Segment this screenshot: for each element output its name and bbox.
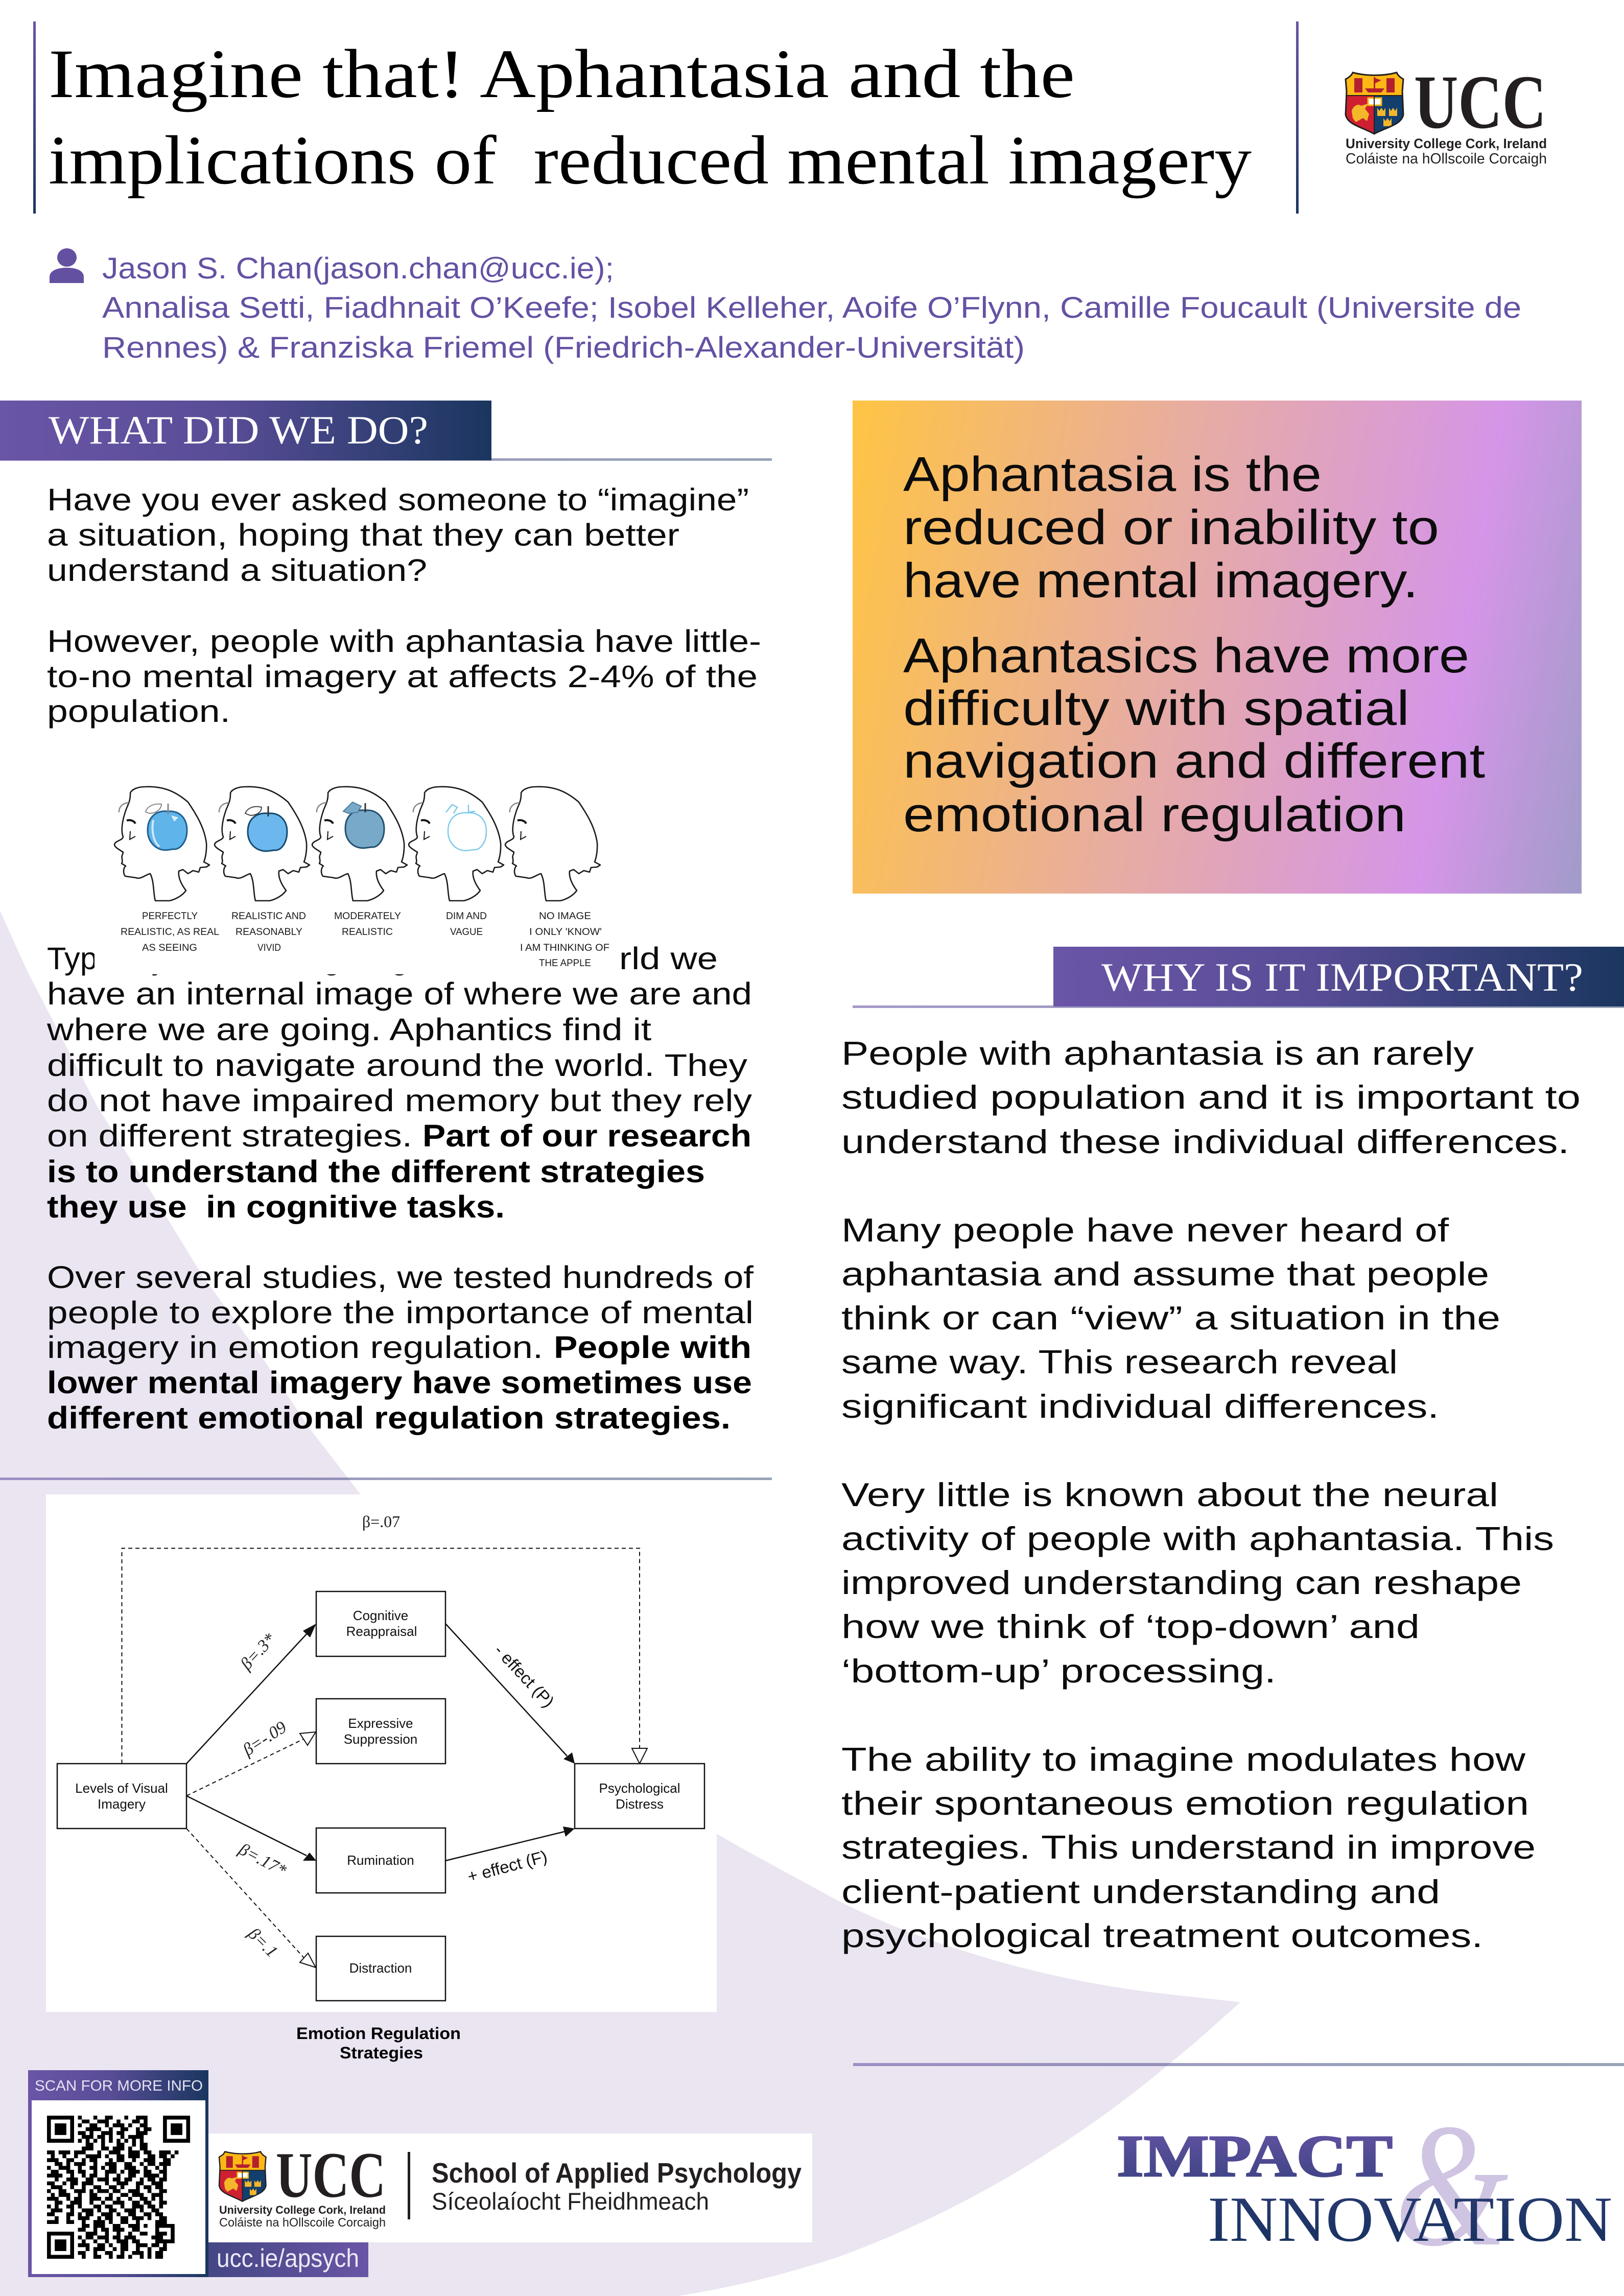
callout: consequences: navigation and different — [903, 734, 1485, 788]
logo: school of applied psychology: University College Cork, Ireland — [219, 2204, 386, 2216]
box: psychological distress: Distress — [616, 1796, 664, 1812]
text block: navigation strategies: Part of our research — [422, 1118, 751, 1153]
text block: why important 2: Many people have never heard of — [841, 1211, 1449, 1249]
heading: what did we do — [0, 401, 491, 460]
text block: emotion regulation studies: different emotional regulation strategies. — [47, 1400, 731, 1435]
QR code — [47, 2116, 190, 2259]
logo: UCC header — [1346, 60, 1547, 167]
heading: what did we do: WHAT DID WE DO? — [49, 408, 428, 452]
text block: navigation strategies: difficult to navigate around the world. They — [47, 1048, 748, 1083]
box: cognitive reappraisal: Reappraisal — [346, 1624, 417, 1639]
captions: REALISTIC — [342, 927, 393, 938]
arrow: imagery to rumination: β=.17* — [235, 1840, 289, 1880]
captions: REALISTIC, AS REAL — [121, 927, 219, 938]
arrow: rumination to distress: + effect (F) — [465, 1846, 549, 1886]
chart caption — [296, 2024, 461, 2062]
QR panel — [28, 2070, 368, 2277]
logo: impact and innovation: & — [1395, 2088, 1509, 2283]
arrow: imagery to suppression: β=-.09 — [239, 1718, 290, 1760]
text block: intro: to-no mental imagery at affects 2-4% of the — [47, 659, 758, 694]
bottom link bar: ucc.ie/apsych — [217, 2244, 359, 2272]
title rule right — [1296, 21, 1299, 214]
box: levels of visual imagery — [57, 1764, 186, 1829]
box: rumination — [316, 1828, 445, 1893]
captions: REASONABLY — [236, 927, 302, 938]
captions: PERFECTLY — [142, 911, 198, 922]
arrow: imagery to reappraisal — [186, 1624, 316, 1764]
UCC wordmark: UCC — [1414, 60, 1546, 145]
text block: intro — [47, 482, 761, 729]
box: levels of visual imagery: Imagery — [98, 1796, 146, 1812]
text block: intro: a situation, hoping that they can better — [47, 518, 679, 552]
text block: why important 3: ‘bottom-up’ processing. — [841, 1652, 1276, 1690]
text block: why important 3: how we think of ‘top-down’ and — [841, 1608, 1420, 1645]
text block: why important 2: think or can “view” a situation in the — [841, 1299, 1500, 1337]
logo: school of applied psychology: UCC — [276, 2140, 386, 2211]
text block: navigation strategies: is to understand the different strategies — [47, 1154, 705, 1189]
chart caption: Strategies — [340, 2044, 423, 2062]
captions: VIVID — [257, 943, 281, 953]
text block: why important 2 — [841, 1211, 1500, 1425]
callout: consequences: difficulty with spatial — [903, 681, 1409, 736]
text block: why important 2: aphantasia and assume that people — [841, 1255, 1489, 1293]
captions: MODERATELY — [334, 911, 401, 922]
text block: navigation strategies: they use in cognitive tasks. — [47, 1189, 505, 1224]
captions: VAGUE — [450, 927, 483, 938]
box: psychological distress — [575, 1764, 704, 1829]
top dashed path — [122, 1512, 647, 1764]
box: levels of visual imagery: Levels of Visual — [75, 1780, 168, 1796]
text block: why important 1: People with aphantasia is an rarely — [841, 1035, 1474, 1072]
top dashed path: β=.07 — [362, 1512, 400, 1531]
text block: emotion regulation studies: lower mental imagery have sometimes use — [47, 1365, 752, 1400]
text block: navigation strategies: do not have impaired memory but they rely — [47, 1083, 752, 1118]
callout: consequences: Aphantasics have more — [903, 628, 1469, 683]
logo: UCC header: University College Cork, Ireland — [1346, 136, 1547, 151]
text block: emotion regulation studies — [47, 1260, 754, 1435]
bottom link bar — [28, 2242, 368, 2277]
logo: school of applied psychology: School of Applied Psychology — [432, 2157, 802, 2189]
arrow: reappraisal to distress: - effect (P) — [491, 1641, 558, 1711]
text block: navigation strategies: Typically, when navigating around the wo — [47, 941, 616, 976]
text block: why important 4: client-patient understanding and — [841, 1873, 1440, 1910]
text block: why important 4: psychological treatment outcomes. — [841, 1917, 1483, 1954]
box: cognitive reappraisal — [316, 1591, 445, 1656]
text block: intro: population. — [47, 694, 230, 729]
captions: NO IMAGE — [539, 911, 591, 922]
callout: consequences: emotional regulation — [903, 787, 1406, 842]
background: lavender shape — [0, 911, 1240, 2296]
callout: consequences — [903, 628, 1485, 842]
icon: person — [50, 248, 84, 283]
text block: why important 3: Very little is known about the neural — [841, 1476, 1498, 1513]
captions: I ONLY 'KNOW' — [529, 927, 602, 938]
head 5: no image — [505, 787, 600, 901]
text block: why important 3 — [841, 1476, 1554, 1690]
head 1: perfectly realistic — [114, 787, 209, 901]
text block: navigation strategies: rld we — [619, 941, 718, 976]
captions — [121, 911, 609, 969]
heading: why is it important — [1053, 947, 1624, 1006]
text block: why important 4: The ability to imagine modulates how — [841, 1741, 1526, 1778]
text block: intro: However, people with aphantasia have little- — [47, 624, 761, 659]
title — [49, 36, 1252, 199]
logo: UCC header: Coláiste na hOllscoile Corcaigh — [1346, 151, 1547, 167]
captions: I AM THINKING OF — [520, 943, 609, 953]
text block: navigation strategies — [46, 941, 752, 1224]
text block: emotion regulation studies: Over several studies, we tested hundreds of — [47, 1260, 754, 1295]
arrow: imagery to distraction: β=.1 — [244, 1924, 281, 1961]
head 4: dim and vague — [409, 787, 504, 901]
callout: definition: reduced or inability to — [903, 500, 1439, 555]
box: distraction: Distraction — [349, 1960, 412, 1976]
icon: UCC crest — [1346, 71, 1403, 136]
box: rumination: Rumination — [347, 1853, 414, 1868]
text block: why important 2: same way. This research reveal — [841, 1343, 1398, 1380]
text block: navigation strategies: on different strategies. — [47, 1118, 412, 1153]
arrow: imagery to reappraisal: β=.3* — [237, 1630, 279, 1674]
authors: Rennes) & Franziska Friemel (Friedrich-Alexander-Universität) — [102, 331, 1025, 364]
box: expressive suppression — [316, 1699, 445, 1764]
text block: why important 2: significant individual differences. — [841, 1388, 1439, 1425]
text block: why important 3: activity of people with aphantasia. This — [841, 1520, 1554, 1557]
logo: school of applied psychology — [208, 2134, 812, 2242]
box: distraction — [316, 1936, 445, 2001]
text block: why important 4: their spontaneous emotion regulation — [841, 1785, 1529, 1822]
box: expressive suppression: Suppression — [344, 1731, 417, 1747]
box: psychological distress: Psychological — [599, 1780, 680, 1796]
head 2: realistic and reasonably vivid — [215, 787, 310, 901]
text block: intro: Have you ever asked someone to “imagine” — [47, 482, 749, 517]
text block: why important 1: understand these individual differences. — [841, 1123, 1569, 1160]
chart caption: Emotion Regulation — [296, 2024, 461, 2043]
text block: why important 4: strategies. This understand in improve — [841, 1829, 1536, 1866]
logo: impact and innovation: INNOVATION — [1208, 2184, 1612, 2255]
logo: impact and innovation — [1117, 2088, 1612, 2283]
text block: emotion regulation studies: People with — [554, 1330, 751, 1365]
scan banner: SCAN FOR MORE INFO — [35, 2078, 203, 2094]
heading: why is it important: WHY IS IT IMPORTANT? — [1101, 955, 1583, 999]
callout: definition: Aphantasia is the — [903, 447, 1322, 502]
logo: impact and innovation: IMPACT — [1117, 2124, 1393, 2189]
authors: Annalisa Setti, Fiadhnait O’Keefe; Isobel Kelleher, Aoife O’Flynn, Camille Foucault (Universite de — [102, 291, 1521, 324]
callout: definition: have mental imagery. — [903, 553, 1418, 608]
captions: DIM AND — [446, 911, 487, 922]
text block: why important 4 — [841, 1741, 1536, 1954]
text block: why important 1 — [841, 1035, 1581, 1160]
text block: why important 3: improved understanding can reshape — [841, 1564, 1522, 1601]
title: implications of reduced mental imagery — [49, 122, 1252, 199]
captions: AS SEEING — [142, 943, 197, 953]
text block: navigation strategies: where we are going. Aphantics find it — [46, 1012, 651, 1047]
text block: navigation strategies: have an internal image of where we are and — [47, 976, 752, 1011]
logo: school of applied psychology: Síceolaíocht Fheidhmeach — [432, 2188, 709, 2215]
box: cognitive reappraisal: Cognitive — [353, 1608, 408, 1623]
arrow: reappraisal to distress — [445, 1624, 575, 1764]
logo: school of applied psychology: Coláiste na hOllscoile Corcaigh — [219, 2216, 386, 2230]
captions: REALISTIC AND — [231, 911, 306, 922]
box: expressive suppression: Expressive — [348, 1716, 413, 1731]
diagram: mediation model — [46, 1494, 717, 2012]
gradient callout panel — [853, 401, 1582, 894]
icon: UCC crest — [219, 2150, 266, 2204]
head 3: moderately realistic — [312, 787, 407, 901]
text block: emotion regulation studies: people to explore the importance of mental — [47, 1295, 754, 1330]
illustration: vividness of mental imagery heads — [95, 766, 618, 974]
arrow: rumination to distress — [445, 1826, 575, 1886]
text block: why important 1: studied population and it is important to — [841, 1079, 1581, 1116]
captions: THE APPLE — [539, 958, 591, 969]
title: Imagine that! Aphantasia and the — [49, 36, 1075, 112]
text block: intro: understand a situation? — [47, 553, 427, 588]
title rule left — [33, 21, 36, 214]
arrow: imagery to rumination — [186, 1796, 316, 1880]
arrow: imagery to suppression — [186, 1718, 316, 1796]
authors — [102, 252, 1521, 364]
text block: emotion regulation studies: imagery in emotion regulation. — [47, 1330, 543, 1365]
callout: definition — [903, 447, 1439, 608]
authors: Jason S. Chan(jason.chan@ucc.ie); — [102, 252, 614, 285]
arrow: imagery to distraction — [186, 1829, 316, 1967]
